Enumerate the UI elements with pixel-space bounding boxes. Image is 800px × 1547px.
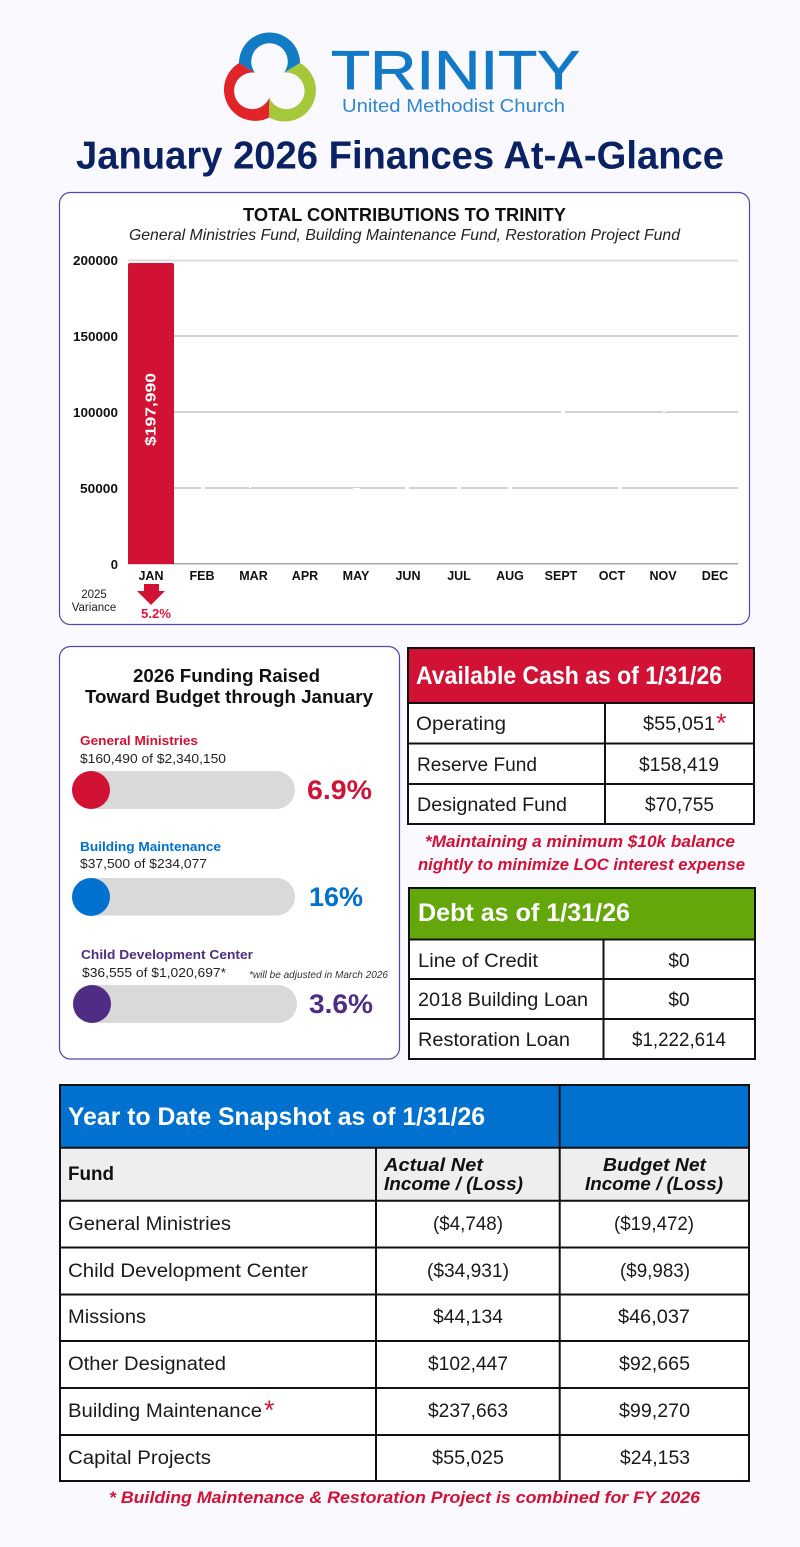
debt rows: 2018 Building Loan (418, 990, 588, 1011)
table: available cash (408, 648, 754, 824)
progress: building maintenance: 16% (309, 882, 363, 912)
bar value: $197,990 (142, 373, 160, 446)
month labels: AUG (496, 569, 524, 583)
month labels: SEPT (545, 569, 578, 583)
progress: general ministries: General Ministries (80, 733, 198, 748)
row: building maintenance: Building Maintenance (68, 1401, 262, 1422)
cash rows: $158,419 (639, 755, 719, 776)
row: child development center: ($34,931) (427, 1261, 509, 1282)
snapshot heading: Year to Date Snapshot as of 1/31/26 (68, 1103, 485, 1131)
chart heading: TOTAL CONTRIBUTIONS TO TRINITY (243, 205, 566, 225)
row: other designated: $102,447 (428, 1354, 508, 1375)
logo wordmark: TRINITY (331, 39, 580, 101)
column headers: Fund (68, 1164, 114, 1185)
debt rows: $1,222,614 (632, 1030, 726, 1051)
month labels: OCT (599, 569, 626, 583)
row: capital projects: Capital Projects (68, 1448, 211, 1469)
funding heading (85, 666, 373, 707)
variance value: 5.2% (141, 607, 171, 621)
cash footnote (418, 833, 745, 874)
debt heading: Debt as of 1/31/26 (418, 899, 630, 927)
row: building maintenance: $237,663 (428, 1401, 508, 1422)
y axis labels (73, 253, 118, 572)
adjustment note: *will be adjusted in March 2026 (249, 969, 388, 981)
table: debt (409, 888, 755, 1059)
progress: building maintenance: Building Maintenance (80, 839, 221, 854)
row: general ministries: General Ministries (68, 1214, 231, 1235)
month labels: JUN (395, 569, 421, 583)
month labels: JUL (447, 569, 471, 583)
row: child development center: Child Development Center (68, 1261, 309, 1282)
cash rows: $70,755 (645, 795, 714, 816)
row: capital projects (68, 1448, 690, 1469)
row: other designated: $92,665 (619, 1354, 690, 1375)
funding heading: 2026 Funding Raised (133, 666, 320, 686)
row: building maintenance: $99,270 (619, 1401, 690, 1422)
variance label: Variance (72, 602, 116, 614)
icon: down arrow (137, 584, 165, 605)
debt rows: $0 (668, 951, 690, 972)
funding heading: Toward Budget through January (85, 687, 373, 707)
row: other designated (68, 1354, 690, 1375)
cash rows: * (716, 708, 727, 738)
month labels: MAY (343, 569, 370, 583)
month labels (138, 569, 728, 583)
month labels: JAN (138, 569, 164, 583)
icon: three-ring trinity mark (224, 32, 316, 122)
variance label: 2025 (81, 589, 107, 601)
row: missions: $46,037 (618, 1307, 690, 1328)
row: building maintenance: * (264, 1395, 275, 1425)
column headers (68, 1154, 723, 1194)
cash footnote: nightly to minimize LOC interest expense (418, 856, 745, 874)
row: missions (68, 1307, 690, 1328)
month labels: NOV (649, 569, 677, 583)
title: January 2026 Finances At-A-Glance (76, 134, 724, 178)
month labels: MAR (239, 569, 268, 583)
progress: general ministries: $160,490 of $2,340,150 (80, 751, 226, 766)
debt rows (418, 951, 726, 1051)
cash rows: Operating (416, 714, 506, 735)
month labels: DEC (702, 569, 728, 583)
cash rows (416, 708, 727, 816)
variance label (72, 589, 116, 614)
column headers: Income / (Loss) (585, 1173, 723, 1194)
row: general ministries (68, 1214, 694, 1235)
cash rows: $55,051 (643, 714, 715, 735)
row: missions: Missions (68, 1307, 146, 1328)
table: year to date snapshot (60, 1085, 749, 1481)
row: general ministries: ($19,472) (614, 1214, 694, 1235)
progress: general ministries: 6.9% (307, 775, 372, 805)
row: missions: $44,134 (433, 1307, 503, 1328)
progress: building maintenance: $37,500 of $234,077 (80, 856, 207, 871)
y axis labels: 50000 (80, 481, 118, 496)
debt rows: Restoration Loan (418, 1030, 570, 1051)
progress: building maintenance (72, 839, 363, 916)
row: building maintenance (68, 1395, 690, 1425)
month labels: APR (292, 569, 318, 583)
column headers: Income / (Loss) (384, 1173, 523, 1194)
progress: child development center: Child Development Center (81, 947, 253, 962)
debt rows: $0 (668, 990, 690, 1011)
panel: funding raised toward budget (60, 646, 400, 1059)
column headers: Budget Net (603, 1154, 707, 1175)
row: capital projects: $55,025 (432, 1448, 504, 1469)
cash rows: Reserve Fund (417, 755, 537, 776)
panel: total contributions chart (60, 192, 750, 624)
y axis labels: 200000 (73, 253, 118, 268)
bar chart (73, 253, 738, 583)
y axis labels: 100000 (73, 405, 118, 420)
row: capital projects: $24,153 (620, 1448, 690, 1469)
progress: child development center (73, 947, 388, 1023)
row: child development center (68, 1261, 690, 1282)
chart subheading: General Ministries Fund, Building Maintenance Fund, Restoration Project Fund (129, 227, 681, 244)
column headers: Actual Net (383, 1154, 484, 1175)
progress: child development center: $36,555 of $1,020,697* (82, 965, 226, 980)
row: other designated: Other Designated (68, 1354, 226, 1375)
row: child development center: ($9,983) (620, 1261, 690, 1282)
debt rows: Line of Credit (418, 951, 539, 972)
cash rows: Designated Fund (417, 795, 567, 816)
cash footnote: *Maintaining a minimum $10k balance (425, 833, 735, 851)
bar: January (128, 263, 174, 564)
cash heading: Available Cash as of 1/31/26 (416, 662, 722, 690)
y axis labels: 0 (111, 557, 118, 572)
logo: Trinity United Methodist Church (224, 32, 580, 122)
y axis labels: 150000 (73, 329, 118, 344)
footnote: * Building Maintenance & Restoration Project is combined for FY 2026 (109, 1488, 701, 1507)
progress: general ministries (72, 733, 372, 809)
row: general ministries: ($4,748) (433, 1214, 503, 1235)
progress: child development center: 3.6% (309, 989, 373, 1019)
logo subtitle: United Methodist Church (342, 95, 565, 116)
month labels: FEB (190, 569, 214, 583)
